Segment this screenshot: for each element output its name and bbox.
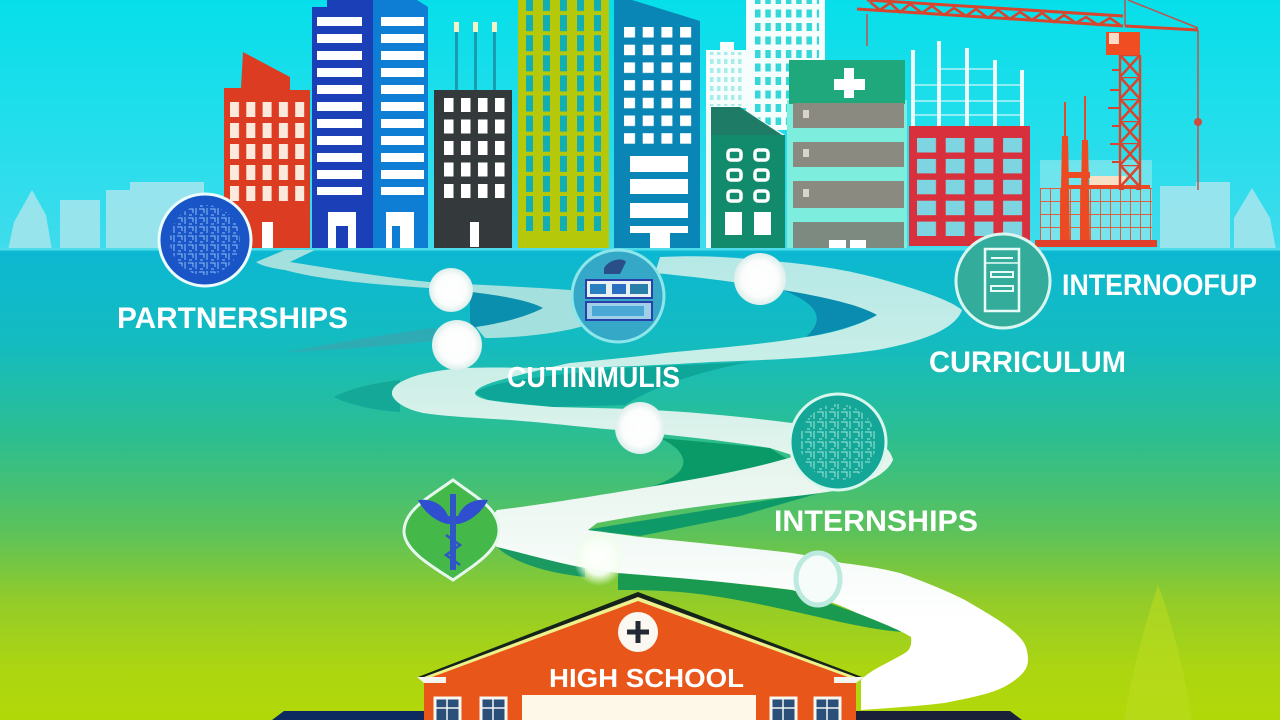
icon: partnerships circle — [159, 194, 251, 286]
winding road main — [392, 256, 1028, 710]
tower crane — [857, 0, 1202, 190]
building: red block — [909, 126, 1030, 246]
building: black office — [434, 22, 512, 248]
icon: caduceus leaf — [404, 480, 499, 580]
building: teal blue tower — [614, 0, 700, 248]
school name: HIGH SCHOOL — [549, 663, 744, 693]
school door — [522, 695, 756, 720]
pale tree — [1124, 585, 1192, 720]
label: CUTINMULUS: CUTIINMULIS — [507, 362, 680, 394]
ground horizon line — [0, 248, 1280, 250]
icon: circuit circle — [790, 394, 886, 490]
road shadows — [287, 290, 905, 632]
label: PARTNERSHIPS: PARTNERSHIPS — [117, 302, 348, 335]
label: INTERNOOFUP: INTERNOOFUP — [1062, 269, 1257, 302]
sky background — [0, 0, 1280, 250]
building: scaffold frame — [911, 41, 1024, 126]
winding road upper band — [256, 250, 592, 338]
building: red office — [224, 52, 310, 248]
building: yellow tower — [518, 0, 609, 248]
icon: cutinmulus classroom circle — [572, 250, 664, 342]
gradient landscape — [0, 250, 1280, 720]
icon: filing cabinet circle — [956, 234, 1050, 328]
school windows — [435, 698, 840, 720]
building: blue tower — [312, 0, 428, 248]
marker nodes — [429, 253, 840, 605]
building: hospital — [787, 60, 907, 248]
roof gable — [418, 592, 862, 677]
ground strip — [272, 711, 425, 720]
school emblem — [618, 612, 658, 652]
label: CURRICULUM: CURRICULUM — [929, 346, 1126, 379]
pale background skyline — [8, 182, 1276, 250]
eaves — [417, 677, 864, 683]
building: green block — [706, 107, 785, 248]
label: INTERNSHIPS: INTERNSHIPS — [774, 505, 978, 538]
construction site — [1035, 96, 1157, 247]
high school building — [272, 592, 1022, 720]
building: white skyscraper — [706, 0, 825, 130]
